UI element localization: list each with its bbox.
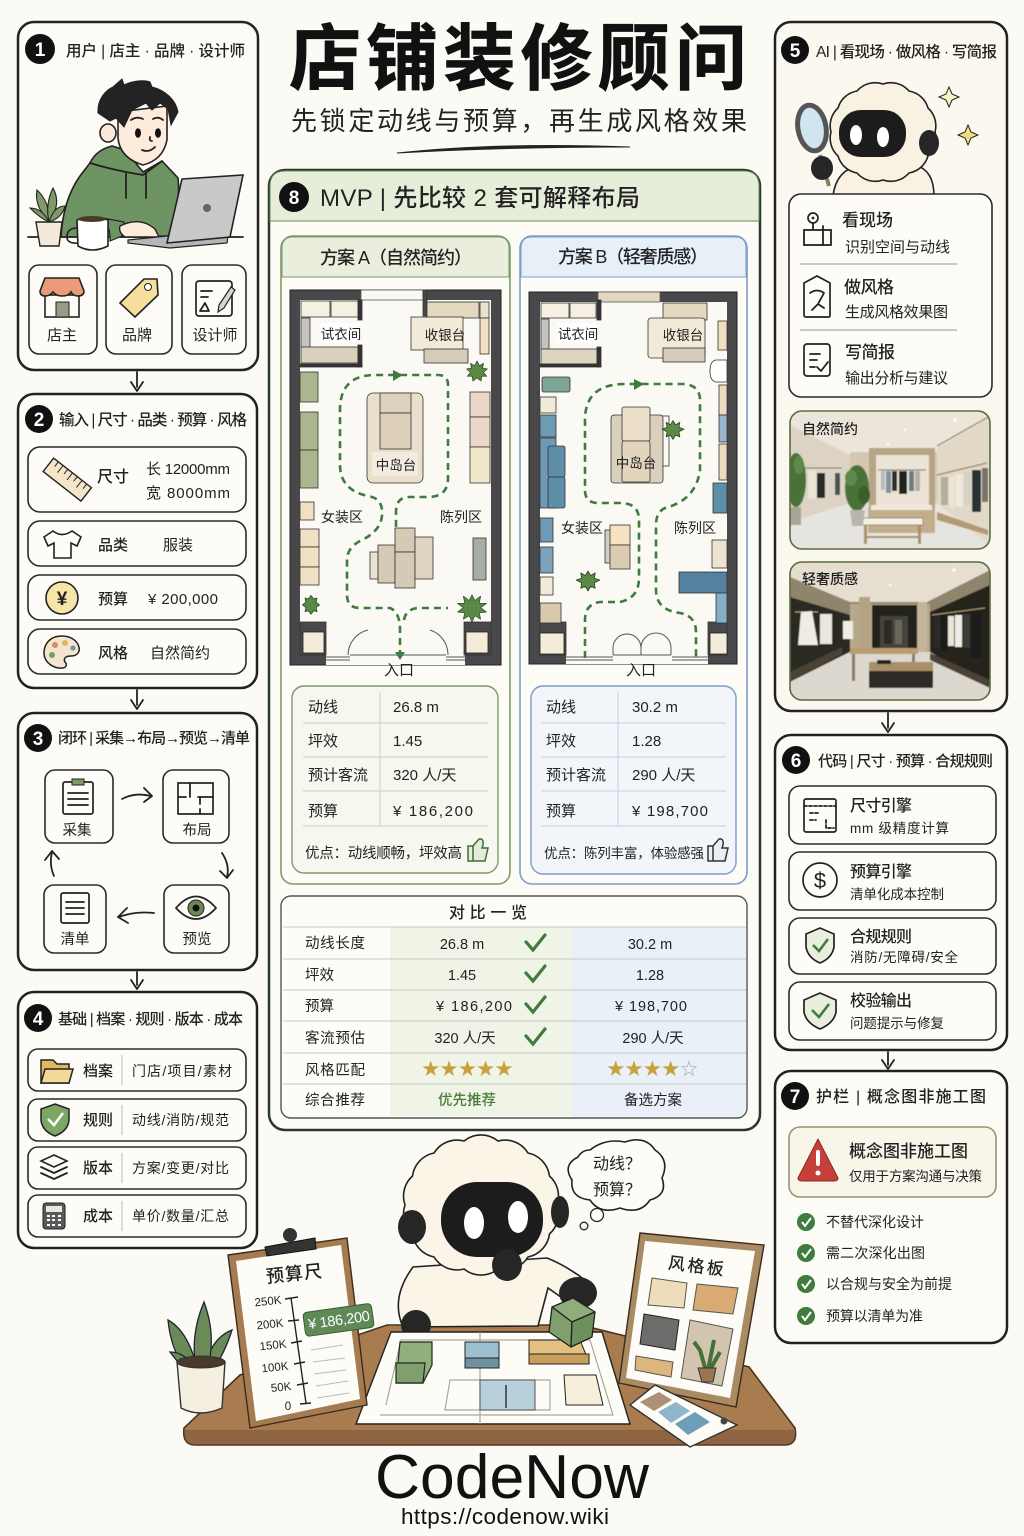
- row: budget: [28, 575, 246, 620]
- number 7: [781, 1082, 809, 1110]
- stats B: 1.28: [632, 733, 661, 750]
- row: versions: 方案/变更/对比: [132, 1160, 229, 1176]
- panel 4: foundation: [18, 992, 257, 1248]
- plan B card: [520, 236, 747, 884]
- row: category: 服装: [163, 537, 193, 554]
- stats A: ¥ 186,200: [392, 803, 473, 820]
- style board: [619, 1233, 764, 1407]
- panel 6: code: [775, 735, 1007, 1050]
- checklist: 需二次深化出图: [826, 1245, 925, 1261]
- panel 8: MVP comparison: [269, 170, 760, 1130]
- floor plan A labels: [320, 323, 482, 679]
- illustration: AI mascot with magnifier: [794, 83, 978, 196]
- plant: [168, 1302, 232, 1413]
- arrow 6 to 7: [882, 1052, 894, 1069]
- row: style: 风格: [98, 645, 128, 662]
- card: store owner: [29, 265, 97, 354]
- stats A: 坪效: [308, 733, 338, 750]
- swatch cards: [630, 1385, 737, 1447]
- number 7: 7: [790, 1087, 800, 1108]
- item: site survey: [804, 211, 950, 256]
- clipboard: budget ruler: 200K: [256, 1318, 284, 1332]
- panel 5: AI: [775, 22, 1007, 711]
- stats B: 预算: [546, 802, 576, 820]
- row: budget: ¥ 200,000: [147, 591, 218, 608]
- row: archive: [28, 1049, 246, 1091]
- comparison table: 客流预估: [305, 1030, 365, 1047]
- heading 2: 输入 | 尺寸 · 品类 · 预算 · 风格: [59, 410, 247, 429]
- row: style: [28, 629, 246, 674]
- row: size: 长 12000mm: [146, 461, 230, 478]
- card: brand: [106, 265, 172, 354]
- item: style: 做风格: [844, 278, 894, 297]
- stats A: 26.8 m: [393, 699, 439, 716]
- comparison table: 320 人/天: [434, 1030, 496, 1047]
- comparison table: ¥ 198,700: [614, 999, 687, 1015]
- floor plan B labels: 入口: [626, 662, 656, 679]
- plan B title: 方案 B（轻奢质感）: [558, 247, 708, 267]
- number 8: [279, 182, 309, 212]
- panel 2: input: [18, 394, 257, 688]
- clipboard: budget ruler: ¥ 186,200: [306, 1309, 371, 1333]
- checklist: 以合规与安全为前提: [826, 1276, 952, 1292]
- thumbs up: [468, 839, 488, 861]
- stats B: 预计客流: [546, 767, 606, 784]
- node: collect: [45, 770, 113, 843]
- row: size: 尺寸: [97, 468, 129, 486]
- row: budget engine: $: [814, 868, 826, 893]
- node: collect: 采集: [62, 822, 92, 839]
- logo: CodeNow: CodeNow: [375, 1443, 649, 1512]
- number 4: [24, 1004, 52, 1032]
- warning text: [816, 1141, 982, 1184]
- green block: [549, 1298, 595, 1347]
- thought bubble: [568, 1140, 665, 1230]
- card: store owner: 店主: [47, 327, 77, 344]
- item: brief: 输出分析与建议: [845, 370, 948, 387]
- stats A: 1.45: [393, 733, 422, 750]
- checklist: 预算以清单为准: [826, 1308, 923, 1324]
- floor plan B labels: 试衣间: [558, 327, 598, 342]
- title swoosh: [397, 145, 630, 153]
- thought bubble: 预算？: [593, 1180, 641, 1199]
- stats B: ¥ 198,700: [631, 803, 708, 820]
- star ratings: ★★★★☆: [607, 1059, 699, 1079]
- route B: [585, 379, 700, 658]
- row: budget engine: 预算引擎: [850, 862, 912, 881]
- heading 1: 用户 | 店主 · 品牌 · 设计师: [66, 42, 245, 60]
- heading 7: 护栏 | 概念图非施工图: [816, 1087, 986, 1106]
- floor plan B labels: 中岛台: [616, 456, 656, 471]
- node: layout: [163, 770, 229, 843]
- style board: 风格板: [667, 1254, 725, 1279]
- row: compliance: [789, 918, 996, 974]
- stats B: 30.2 m: [632, 699, 678, 716]
- node: preview: 预览: [182, 931, 212, 948]
- floor plan A labels: 试衣间: [321, 327, 361, 342]
- comparison table: 1.28: [636, 968, 664, 984]
- comparison table: 坪效: [305, 967, 334, 984]
- row: rules: 动线/消防/规范: [132, 1112, 229, 1128]
- number 8: 8: [289, 188, 299, 209]
- floor plan B labels: [557, 323, 716, 679]
- number 1: 1: [35, 40, 46, 61]
- row: validation: 校验输出: [850, 991, 912, 1010]
- row: rules: [28, 1099, 246, 1141]
- floor plan B labels: 收银台: [663, 328, 703, 343]
- row: size engine: mm 级精度计算: [850, 821, 949, 836]
- heading 5: AI | 看现场 · 做风格 · 写简报: [816, 43, 997, 61]
- row: validation: 问题提示与修复: [850, 1015, 944, 1031]
- title: 店铺装修顾问: [289, 20, 747, 100]
- row: category: 品类: [98, 537, 128, 554]
- row: rules: 规则: [83, 1112, 113, 1129]
- row: budget: 预算: [98, 590, 128, 608]
- clipboard: budget ruler: 250K: [254, 1295, 282, 1309]
- number 2: 2: [34, 410, 44, 431]
- warning card: [789, 1127, 996, 1197]
- panel 1: users: [18, 22, 258, 370]
- item: site survey: 识别空间与动线: [845, 239, 950, 256]
- stats A: 预计客流: [308, 767, 368, 784]
- number 2: [25, 405, 53, 433]
- thumbs up: [708, 839, 728, 861]
- item: style: 生成风格效果图: [845, 304, 948, 321]
- checklist: 不替代深化设计: [826, 1214, 924, 1230]
- floor plan B: [529, 292, 737, 679]
- stats B: [531, 686, 736, 874]
- route A: [340, 370, 448, 660]
- stats B: 动线: [546, 699, 576, 716]
- node: preview: [164, 885, 229, 953]
- star ratings: [422, 1059, 699, 1079]
- number 3: [24, 724, 52, 752]
- row: costs: 单价/数量/汇总: [132, 1208, 229, 1224]
- comparison table: 优先推荐: [438, 1092, 496, 1109]
- item: brief: [804, 343, 948, 387]
- heading 8: MVP | 先比较 2 套可解释布局: [320, 185, 640, 212]
- photo: natural minimal: 自然简约: [802, 421, 858, 437]
- node: layout: 布局: [182, 822, 212, 839]
- card: brand: 品牌: [122, 327, 152, 344]
- item: site survey: 看现场: [842, 211, 893, 230]
- stats A: 动线: [308, 699, 338, 716]
- warning text: 概念图非施工图: [849, 1141, 968, 1161]
- stats A: 320 人/天: [393, 767, 456, 784]
- row: budget engine: 清单化成本控制: [850, 887, 944, 902]
- comparison table: 30.2 m: [628, 937, 672, 953]
- floor plan A labels: 入口: [384, 662, 414, 679]
- floor plan A: [290, 290, 501, 679]
- row: costs: [28, 1195, 246, 1237]
- photo: light luxury: 轻奢质感: [802, 571, 858, 587]
- check marks: [526, 935, 545, 1044]
- photo: natural minimal: [786, 411, 990, 549]
- stats A: [292, 686, 498, 873]
- card: designer: 设计师: [192, 327, 238, 344]
- clipboard: budget ruler: 预算尺: [265, 1261, 323, 1287]
- loop arrows: [45, 788, 233, 923]
- plan A card: [281, 236, 510, 884]
- row: category: [28, 521, 246, 566]
- number 3: 3: [33, 729, 43, 750]
- floor plan A labels: 收银台: [425, 328, 465, 343]
- arrow 3 to 4: [131, 972, 143, 989]
- comparison table: 动线长度: [305, 935, 365, 952]
- arrow 2 to 3: [131, 690, 143, 709]
- row: size engine: 尺寸引擎: [850, 796, 912, 815]
- row: archive: 档案: [83, 1062, 113, 1080]
- plants: [576, 421, 684, 591]
- desk: [184, 1325, 796, 1445]
- comparison table: 26.8 m: [440, 937, 484, 953]
- panel 3: loop: [18, 713, 257, 970]
- comparison table: 风格匹配: [305, 1062, 366, 1079]
- node: checklist: [44, 885, 106, 953]
- number 1: [25, 34, 55, 64]
- row: versions: 版本: [83, 1160, 113, 1177]
- heading 4: 基础 | 档案 · 规则 · 版本 · 成本: [58, 1010, 243, 1028]
- comparison table: 290 人/天: [622, 1030, 684, 1047]
- row: versions: [28, 1147, 246, 1189]
- node: checklist: 清单: [60, 931, 90, 948]
- number 5: [781, 36, 809, 64]
- number 6: [782, 746, 810, 774]
- panel 7: guardrails: [775, 1071, 1007, 1343]
- row: costs: 成本: [83, 1208, 113, 1225]
- comparison table: [281, 896, 747, 1118]
- heading 3: 闭环 | 采集→布局→预览→清单: [58, 730, 250, 747]
- number 5: 5: [790, 41, 801, 62]
- stats A: 预算: [308, 802, 338, 820]
- plants: [302, 361, 487, 622]
- comparison table: 综合推荐: [305, 1092, 365, 1109]
- mascot: [398, 1135, 597, 1340]
- row: size engine: [789, 786, 996, 844]
- floor plan A labels: 中岛台: [376, 458, 416, 473]
- card: designer: [182, 265, 246, 354]
- comparison table: 1.45: [448, 968, 476, 984]
- floor plan B labels: 陈列区: [674, 520, 716, 536]
- arrow 1 to 2: [131, 372, 143, 391]
- url: https://codenow.wiki: [401, 1504, 609, 1529]
- row: size: 宽 8000mm: [146, 485, 230, 502]
- card: AI capabilities: [789, 194, 992, 397]
- thought bubble: 动线？: [593, 1155, 641, 1173]
- row: budget engine: [789, 852, 996, 910]
- arrow 5 to 6: [882, 713, 894, 732]
- clipboard: budget ruler: 0: [285, 1401, 291, 1413]
- clipboard: budget ruler: 100K: [261, 1361, 289, 1375]
- warning text: 仅用于方案沟通与决策: [849, 1168, 982, 1184]
- icon: warning: [798, 1139, 838, 1181]
- number 4: 4: [33, 1009, 44, 1030]
- clipboard: budget ruler: 50K: [270, 1381, 292, 1395]
- floor plan sheet with blocks: [356, 1332, 630, 1424]
- plan A title: 方案 A（自然简约）: [320, 247, 472, 268]
- row: size: [28, 447, 246, 512]
- stats A: 优点：动线顺畅，坪效高: [305, 845, 462, 862]
- stats B: 坪效: [546, 733, 576, 750]
- fixtures: [540, 300, 727, 655]
- illustration: mascot at desk: [168, 1135, 796, 1447]
- row: validation: [789, 982, 996, 1040]
- number 6: 6: [791, 751, 801, 772]
- item: style: [804, 276, 948, 321]
- floor plan A labels: 陈列区: [440, 509, 482, 525]
- subtitle: 先锁定动线与预算，再生成风格效果: [291, 106, 747, 136]
- floor plan A labels: 女装区: [321, 509, 363, 525]
- row: style: 自然简约: [150, 645, 210, 662]
- comparison table: ¥ 186,200: [435, 999, 512, 1015]
- star ratings: ★★★★★: [422, 1059, 514, 1079]
- table title: 对比一览: [449, 904, 527, 922]
- checklist: [797, 1213, 952, 1325]
- photo: light luxury: [790, 562, 990, 700]
- stats B: 优点：陈列丰富，体验感强: [544, 845, 704, 861]
- heading 6: 代码 | 尺寸 · 预算 · 合规规则: [818, 752, 993, 770]
- floor plan B labels: 女装区: [561, 520, 603, 536]
- item: brief: 写简报: [845, 343, 895, 362]
- clipboard: budget ruler: 150K: [259, 1339, 287, 1353]
- row: budget: ¥: [57, 589, 68, 610]
- illustration: user at laptop: [28, 79, 243, 250]
- stats B: 290 人/天: [632, 767, 695, 784]
- row: archive: 门店/项目/素材: [132, 1063, 232, 1079]
- row: compliance: 消防/无障碍/安全: [850, 949, 958, 965]
- fixtures: [300, 290, 491, 655]
- comparison table: 预算: [305, 998, 334, 1015]
- clipboard: budget ruler: [228, 1228, 374, 1428]
- comparison table: 备选方案: [624, 1091, 682, 1109]
- row: compliance: 合规规则: [850, 928, 912, 946]
